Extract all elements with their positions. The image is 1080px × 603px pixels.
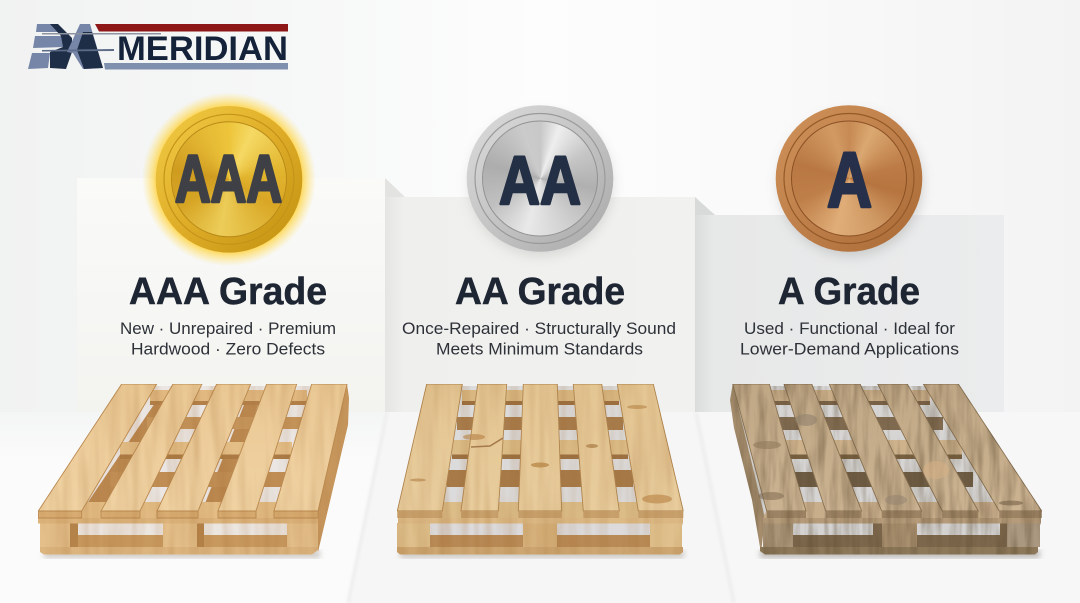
coin: silver AA [467,105,613,256]
panel: A grade [695,105,1004,412]
logo wordmark: MERIDIAN [117,30,288,68]
deck boards [397,384,683,518]
description: AA: Meets Minimum Standards [436,340,643,358]
description: A: Used · Functional · Ideal for [744,319,955,338]
deck boards [733,384,1042,518]
description: A: Lower-Demand Applications [740,340,959,358]
heading: A Grade: A Grade [778,271,920,313]
panel: AA grade [385,105,695,412]
coin: silver AA: AA [499,142,581,219]
description: AA: Once-Repaired · Structurally Sound [402,319,676,338]
pallet: repaired AA [397,384,684,558]
panel: AAA grade [77,92,386,412]
pallet: new AAA [38,384,349,558]
heading: AAA Grade: AAA Grade [129,271,327,313]
description: AAA [120,319,336,358]
coin: gold AAA [142,92,316,266]
coin: bronze A: A [827,136,872,224]
heading: AA Grade: AA Grade [455,271,625,313]
pallet: used A [730,384,1042,558]
weathering stains [753,414,1023,506]
description: AAA: New · Unrepaired · Premium [120,319,336,338]
description: AA [402,319,676,358]
logo: Meridian [28,24,288,70]
coin: bronze A [776,105,923,256]
description: A [740,319,959,358]
coin: gold AAA: AAA [175,142,282,217]
description: AAA: Hardwood · Zero Defects [131,340,325,358]
repair split and knots [410,405,672,504]
deck boards [38,384,347,518]
